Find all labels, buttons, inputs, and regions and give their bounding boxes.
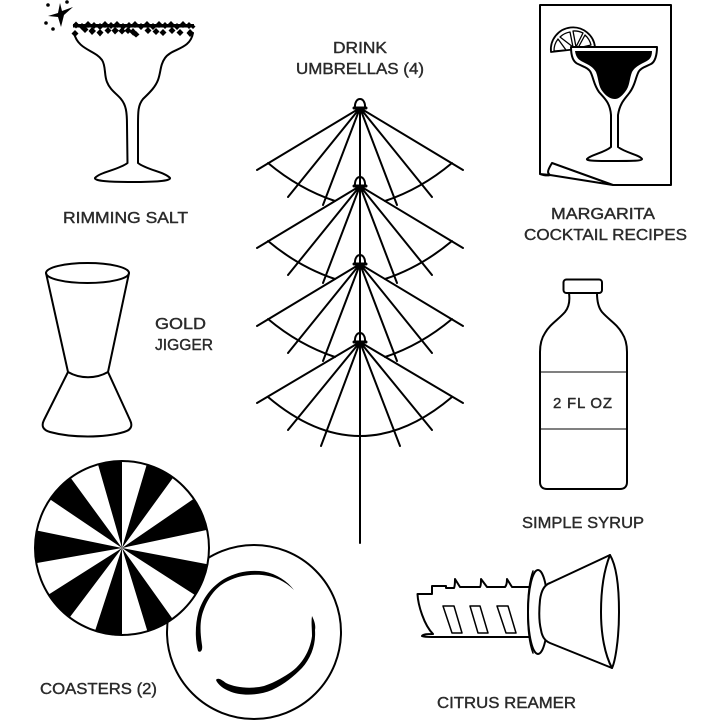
label: simple syrup: SIMPLE SYRUP xyxy=(522,515,644,532)
label: rimming salt: RIMMING SALT xyxy=(63,210,188,227)
heading: margarita cocktail recipes: MARGARITA xyxy=(551,206,655,223)
umbrella 2 xyxy=(257,177,463,283)
label: coasters: COASTERS (2) xyxy=(40,681,157,698)
heading: drink umbrellas: DRINK xyxy=(333,40,387,57)
icon: jigger xyxy=(43,263,131,436)
bottle label text: 2 FL OZ xyxy=(553,395,612,412)
icon: citrus reamer xyxy=(418,555,619,668)
icon: salt-rimmed margarita glass xyxy=(44,0,196,182)
label: gold jigger xyxy=(155,316,213,354)
umbrella 3 xyxy=(257,255,463,361)
icon: stacked drink umbrellas xyxy=(257,99,463,543)
icon: margarita glass xyxy=(571,47,657,161)
label: gold jigger: GOLD xyxy=(155,316,206,333)
icon: striped coaster xyxy=(35,461,209,635)
umbrella 4 xyxy=(257,333,463,446)
icon: recipe page xyxy=(540,5,671,185)
label: citrus reamer: CITRUS REAMER xyxy=(437,695,576,712)
label: gold jigger: JIGGER xyxy=(155,337,213,354)
heading: drink umbrellas: UMBRELLAS (4) xyxy=(296,61,424,78)
icon: plain coaster with drink ring xyxy=(167,545,341,719)
heading: drink umbrellas xyxy=(296,40,424,78)
umbrella 1 xyxy=(257,99,463,205)
icon: simple syrup bottle xyxy=(540,280,627,489)
icon: lime slice xyxy=(551,27,595,52)
umbrella stick xyxy=(359,108,361,543)
icon: sparkle xyxy=(44,0,73,31)
heading: margarita cocktail recipes xyxy=(524,206,687,244)
heading: margarita cocktail recipes: COCKTAIL RECIPES xyxy=(524,227,687,244)
